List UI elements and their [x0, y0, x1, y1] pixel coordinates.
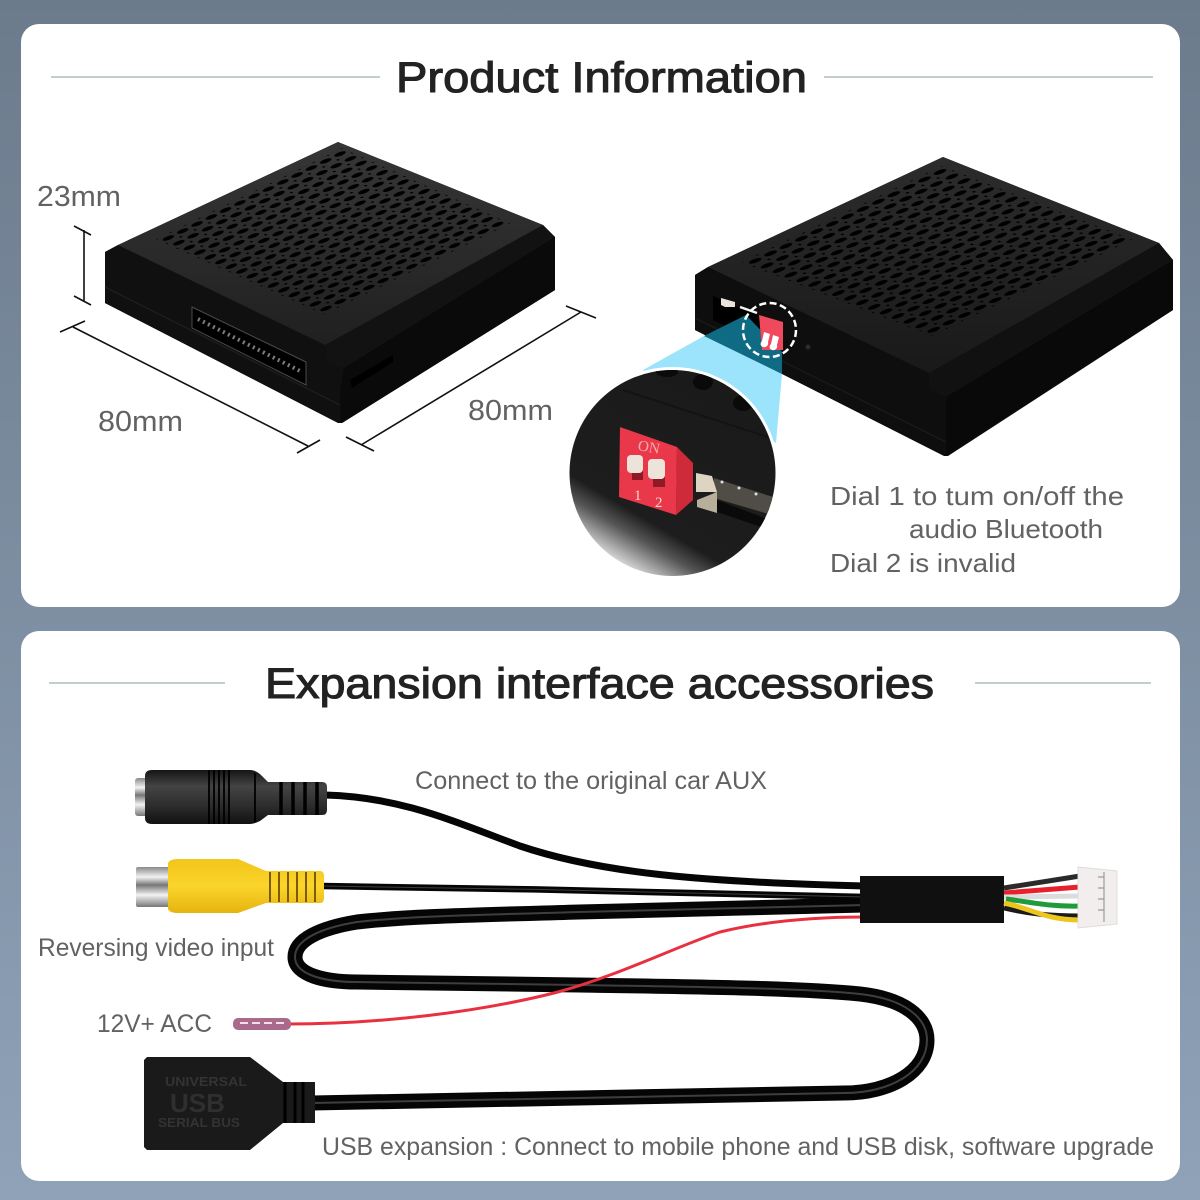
magnified switch circle — [566, 367, 778, 579]
magnified switch circle: 2 — [655, 495, 662, 511]
icon: RCA plug — [136, 859, 324, 913]
dimension: 80mm left: 80mm — [98, 406, 183, 438]
label: ACC: 12V+ ACC — [97, 1010, 212, 1038]
text: dial instructions: Dial 2 is invalid — [830, 548, 1016, 578]
icon: USB plug: UNIVERSAL — [165, 1074, 247, 1089]
text: dial instructions: audio Bluetooth — [909, 514, 1103, 544]
dimension: 80mm right: 80mm — [468, 395, 553, 427]
cable: red ACC wire — [288, 917, 865, 1024]
cable: AUX — [325, 795, 865, 886]
icon: USB plug — [144, 1057, 315, 1150]
heading: expansion interface accessories: Expansion interface accessories — [265, 660, 934, 708]
icon: coloured wires and white connector — [1004, 867, 1117, 928]
dimension: 80mm left — [60, 321, 320, 453]
label: USB expansion: USB expansion : Connect to mobile phone and USB disk, software upgrade — [322, 1133, 1154, 1161]
text: dial instructions — [830, 481, 1124, 578]
icon: USB plug: SERIAL BUS — [158, 1115, 240, 1130]
icon: AUX plug — [135, 770, 327, 824]
label: reversing: Reversing video input — [38, 934, 274, 962]
panel: product information — [21, 24, 1180, 607]
icon: small dip switch with dashed circle — [743, 303, 796, 357]
icon: ACC pin terminal — [233, 1018, 291, 1030]
device: top view with dimensions — [105, 142, 555, 423]
heading: product information: Product Information — [396, 54, 807, 102]
dimension: 23mm — [37, 181, 121, 305]
magnified switch circle: 1 — [634, 488, 642, 504]
magnified switch circle: ON — [637, 438, 661, 458]
panel: expansion accessories — [21, 631, 1180, 1181]
icon: USB plug: USB — [170, 1088, 225, 1118]
text: dial instructions: Dial 1 to tum on/off the — [830, 481, 1124, 511]
dimension: 23mm: 23mm — [37, 181, 121, 213]
dimension: 80mm right — [346, 306, 596, 451]
label: AUX: Connect to the original car AUX — [415, 767, 767, 795]
device: switch side view — [695, 157, 1173, 456]
icon: white port — [721, 298, 757, 313]
icon: magnified connector — [696, 473, 773, 528]
magnifier beam — [643, 315, 782, 443]
cable: loop to USB — [295, 905, 927, 1103]
icon: sleeve — [860, 876, 1004, 923]
icon: pin connector — [192, 307, 306, 385]
cable: RCA — [322, 886, 865, 897]
